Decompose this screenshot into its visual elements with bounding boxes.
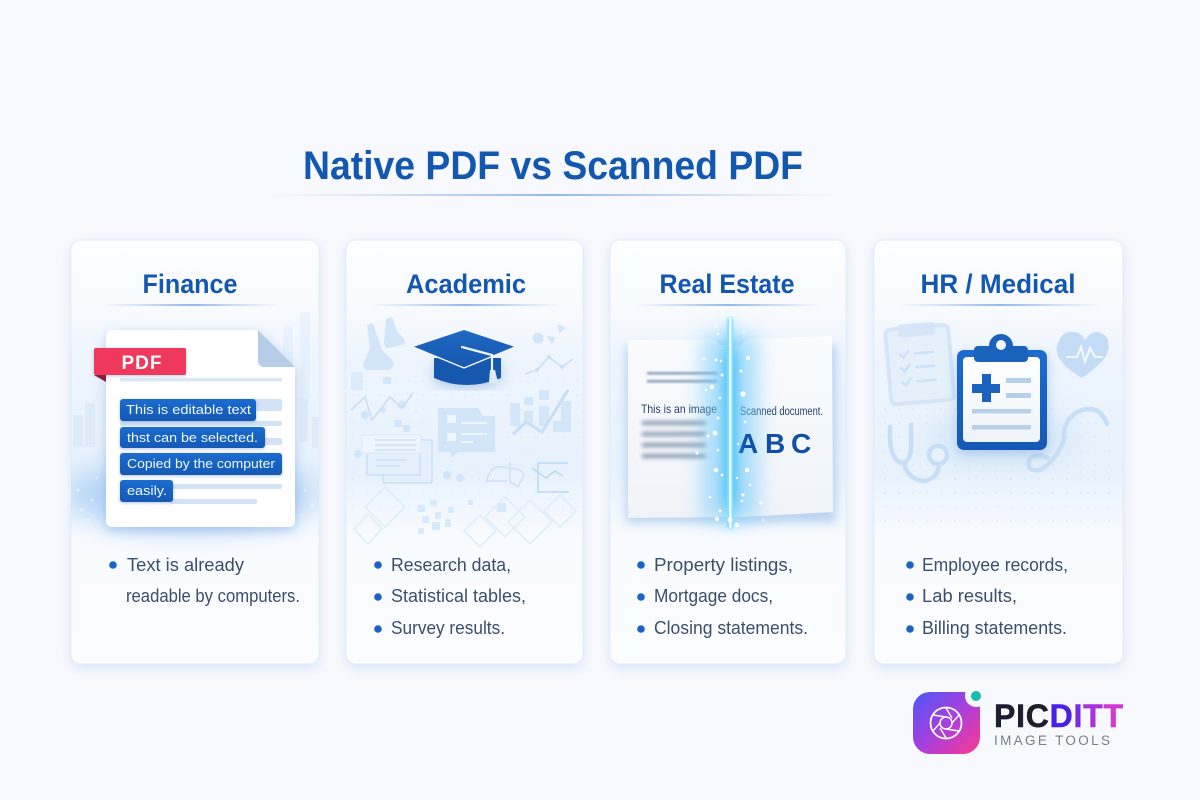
faded document stack: [362, 435, 432, 483]
title: Native PDF vs Scanned PDF: [303, 144, 803, 188]
faded heart: [1057, 332, 1109, 378]
panel: HR / Medical: [874, 240, 1123, 664]
right page: [702, 335, 833, 520]
faded stethoscopes: [890, 409, 1107, 481]
bullet list: HR / Medical: Lab results,: [922, 585, 1017, 606]
selected text lines: [120, 399, 282, 502]
scan glow under ABC: [702, 335, 811, 520]
bullet list: Academic: [374, 554, 526, 638]
particles: [696, 326, 764, 527]
icon: scanned document with beam: [626, 318, 836, 528]
bullet list: Finance: [109, 554, 300, 606]
logo mark: [913, 685, 987, 754]
selected text lines: This is editable text: [126, 403, 252, 417]
icon: PDF document: [94, 330, 295, 527]
PDF ribbon: PDF: [122, 353, 162, 374]
scan glow under ABC: B: [765, 428, 785, 459]
scan beam: [723, 318, 737, 528]
panel: Real Estate: [610, 240, 846, 664]
bullet list: HR / Medical: Billing statements.: [922, 617, 1067, 638]
panel: Finance: [60, 240, 320, 664]
decorative glow and bars: [60, 312, 320, 529]
scan glow under ABC: C: [791, 428, 811, 459]
clip: [974, 334, 1028, 362]
logo wordmark: PICDITT: [994, 698, 1123, 734]
icon: graduation cap: [413, 330, 515, 385]
bullet list: Academic: Statistical tables,: [391, 585, 526, 606]
bullet list: Academic: Survey results.: [391, 617, 505, 638]
left page: [628, 339, 730, 518]
logo: Picditt: [913, 685, 1123, 754]
scan glow under ABC: A: [738, 428, 758, 459]
bullet list: Real Estate: Mortgage docs,: [654, 585, 773, 606]
heading: HR / Medical: HR / Medical: [920, 269, 1076, 299]
heading: Real Estate: Real Estate: [660, 269, 794, 299]
bullet list: Academic: Research data,: [391, 554, 511, 575]
PDF ribbon: [94, 348, 186, 382]
bullet list: Real Estate: Closing statements.: [654, 617, 808, 638]
logo tagline: IMAGE TOOLS: [994, 733, 1110, 748]
heading: Academic: Academic: [406, 269, 526, 299]
right page: Scanned document.: [740, 406, 823, 418]
selected text lines: easily.: [127, 484, 167, 498]
selected text lines: Copied by the computer: [127, 457, 275, 471]
heading: Finance: Finance: [142, 269, 238, 299]
bullet list: HR / Medical: [906, 554, 1068, 638]
selected text lines: thst can be selected.: [127, 431, 258, 445]
icon: medical clipboard: [957, 334, 1047, 450]
panel: Academic: [346, 240, 583, 664]
bullet list: Real Estate: Property listings,: [654, 554, 793, 575]
faded academic background icons: [346, 317, 583, 547]
bullet list: Finance: Text is already: [127, 554, 245, 575]
bullet list: Finance: readable by computers.: [126, 585, 300, 606]
left page: This is an image: [641, 402, 717, 416]
faded clipboard: [885, 320, 954, 405]
bullet list: HR / Medical: Employee records,: [922, 554, 1068, 575]
faded medical background icons: [874, 320, 1123, 530]
bullet list: Real Estate: [637, 554, 808, 638]
